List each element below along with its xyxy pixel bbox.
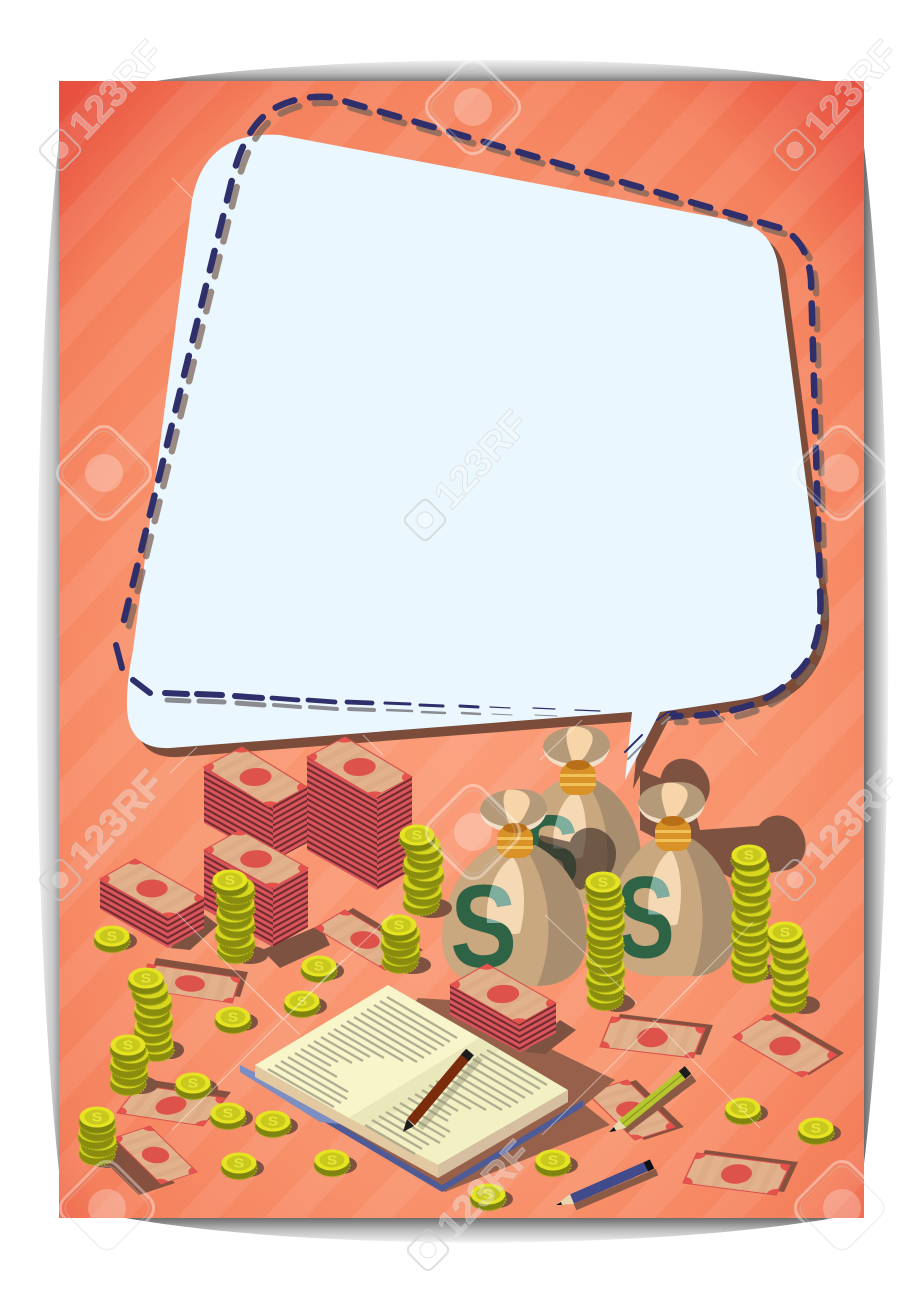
- coin stack A: [399, 824, 452, 918]
- money bag: right: S: [616, 853, 675, 982]
- flat bills: [92, 902, 851, 1202]
- money bag: right: [620, 838, 735, 976]
- money bag top: front: [480, 789, 547, 858]
- money bag: back: S: [521, 795, 580, 910]
- big shadow behind bags: [640, 750, 814, 880]
- money bag: back: [530, 780, 641, 904]
- pen on book: [403, 1052, 480, 1132]
- money bag: front: S: [450, 861, 517, 993]
- money stack 1: [190, 739, 321, 861]
- bag cast shadow: [535, 828, 616, 890]
- money stack 3: [190, 822, 330, 968]
- money bag: front: [442, 845, 587, 993]
- coin stack C: [381, 914, 431, 974]
- speech bubble shadow: [135, 144, 829, 789]
- coin stack H: [731, 844, 779, 984]
- dashed outline: [116, 97, 825, 759]
- coin stack B: [212, 870, 268, 964]
- watermark lines: [170, 178, 760, 1135]
- book shadow: [330, 998, 615, 1192]
- coin stack I: [767, 922, 820, 1014]
- coin stack F: [78, 1106, 126, 1168]
- open book: [240, 985, 583, 1192]
- money bag: front: S: [450, 861, 517, 993]
- blue pencil: [556, 1164, 657, 1207]
- coin stack E: [110, 1034, 158, 1096]
- money bag top: back: [543, 726, 610, 795]
- money stack 5: [436, 956, 576, 1054]
- panel: orange striped background: [59, 81, 864, 1218]
- money bag: back: S: [521, 795, 580, 910]
- money bag: right: S: [616, 853, 675, 982]
- money stack 2: [293, 729, 426, 890]
- money stack 4: [86, 851, 218, 950]
- coin stack D: [128, 968, 184, 1062]
- speech bubble: [127, 135, 821, 780]
- single coins: [94, 926, 841, 1210]
- coin stack G: [585, 872, 635, 1012]
- money bag top: right: [638, 782, 705, 851]
- yellow pencil: [609, 1070, 694, 1132]
